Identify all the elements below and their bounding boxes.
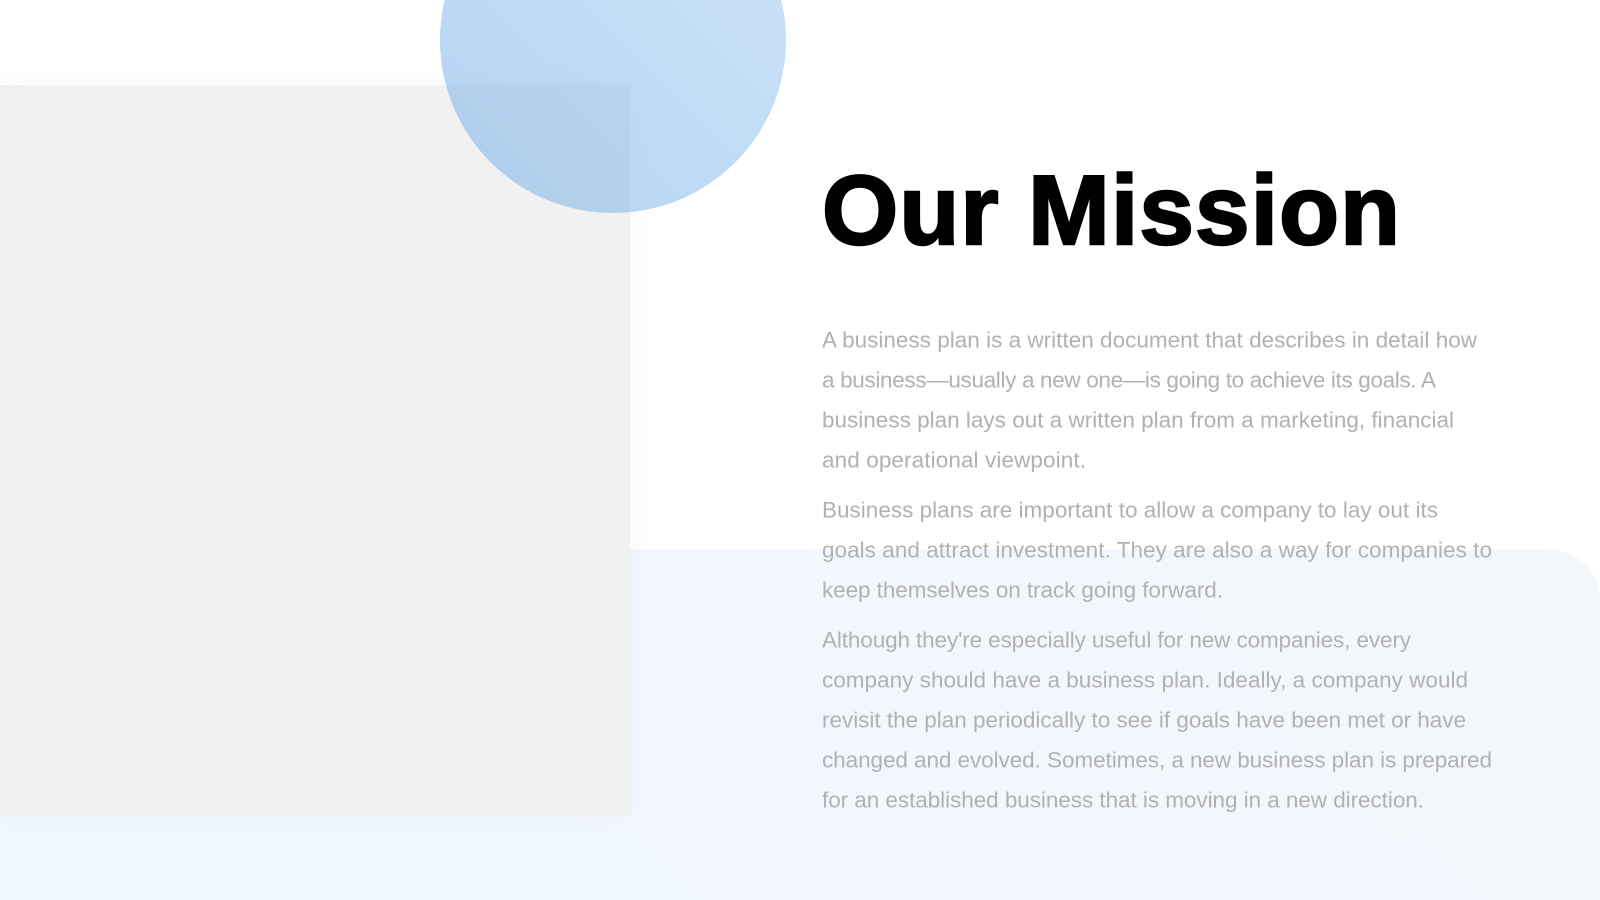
text block: paragraph 3: changed and evolved. Sometimes, a new business plan is prepared (822, 748, 1492, 772)
text block: paragraph 3: revisit the plan periodically to see if goals have been met or have (822, 708, 1466, 732)
title: Our Mission (822, 155, 1400, 265)
text block: paragraph 3 (822, 628, 1492, 812)
text block: paragraph 1: a business—usually a new one—is going to achieve its goals. A (822, 368, 1436, 392)
text block: paragraph 1: business plan lays out a written plan from a marketing, financial (822, 408, 1454, 432)
text block: paragraph 2 (822, 498, 1492, 602)
text block: paragraph 1: A business plan is a written document that describes in detail how (822, 328, 1478, 352)
text block: paragraph 3: Although they're especially useful for new companies, every (822, 628, 1412, 652)
panel: pale blue background band (0, 549, 1600, 900)
icon: decorative blue circle (440, 0, 786, 213)
text block: paragraph 2: Business plans are important to allow a company to lay out its (822, 498, 1438, 522)
text block: paragraph 1 (822, 328, 1478, 472)
text block: paragraph 1: and operational viewpoint. (822, 448, 1086, 472)
text block: paragraph 3: for an established business that is moving in a new direction. (822, 788, 1424, 812)
text block: paragraph 3: company should have a business plan. Ideally, a company would (822, 668, 1468, 692)
panel: gray image placeholder (0, 85, 630, 816)
text block: paragraph 2: keep themselves on track going forward. (822, 578, 1223, 602)
text block: paragraph 2: goals and attract investment. They are also a way for companies to (822, 538, 1492, 562)
